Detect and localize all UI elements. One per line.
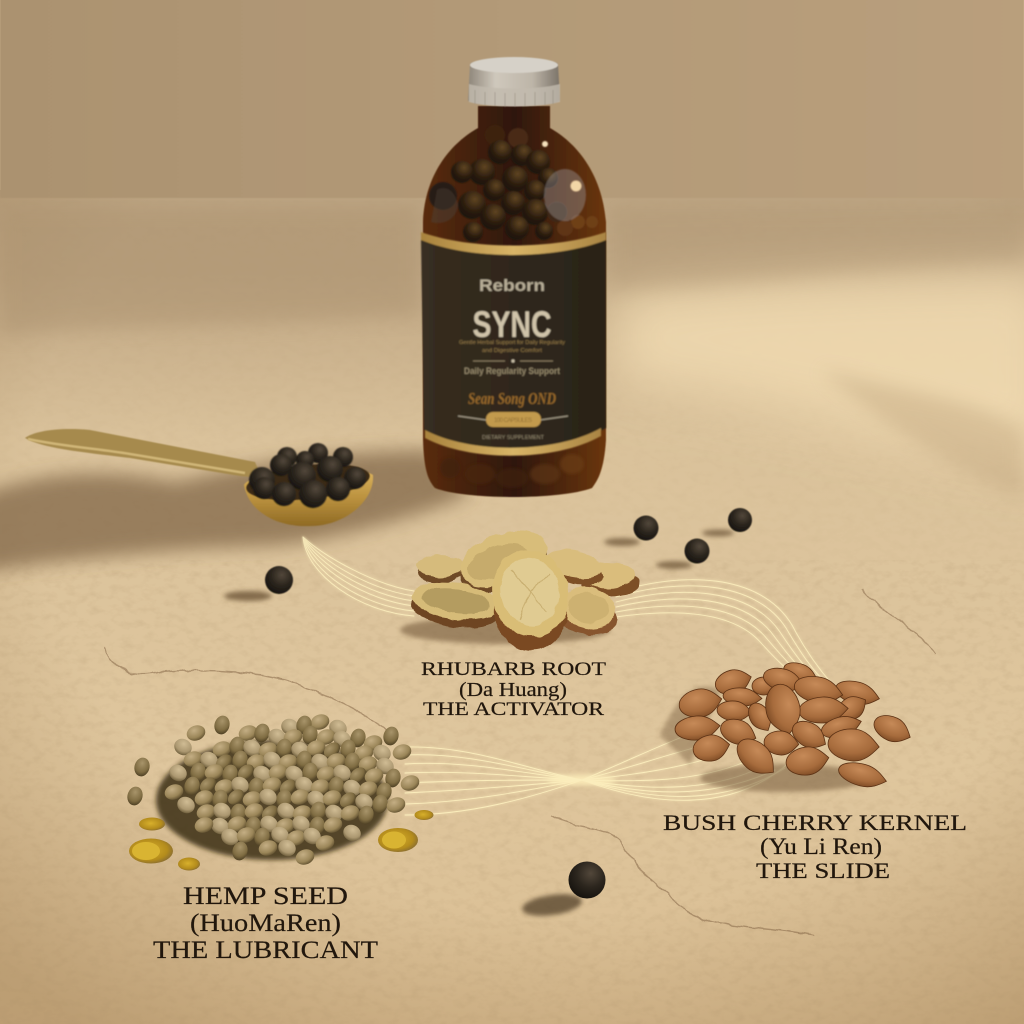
bottle label: Gentle Herbal Support for Daily Regularity (459, 340, 565, 346)
label: rhubarb root: (Da Huang) (459, 679, 567, 701)
bottle label: Daily Regularity Support (464, 366, 560, 376)
pills in spoon (249, 443, 366, 508)
pills inside bottle (429, 125, 598, 242)
slice: front left (409, 577, 501, 633)
label: bush cherry kernel: BUSH CHERRY KERNEL (663, 810, 967, 835)
spoon bowl (244, 470, 373, 526)
slice: centre (482, 541, 578, 659)
label: bush cherry kernel (663, 810, 967, 883)
kernel pile (660, 659, 915, 792)
bottle label: SYNC (472, 304, 552, 345)
bottle label (421, 232, 606, 456)
rhubarb shadow (400, 616, 610, 644)
bottle label: DIETARY SUPPLEMENT (482, 435, 545, 441)
label: bush cherry kernel: THE SLIDE (756, 858, 890, 883)
oil drop small left (139, 818, 165, 830)
label: hemp seed (153, 883, 378, 964)
rhubarb root slices (400, 520, 639, 659)
label: hemp seed: HEMP SEED (183, 883, 348, 910)
label: rhubarb root: THE ACTIVATOR (423, 699, 604, 720)
hemp seed pile (125, 712, 421, 867)
bottle cap (468, 57, 560, 107)
slice: front right (557, 582, 619, 635)
golden flow lines: spoon to rhubarb (303, 537, 414, 616)
bottle label: and Digestive Comfort (482, 348, 543, 354)
background: stone wall (0, 0, 1024, 198)
golden flow lines: rhubarb to bush cherry (616, 580, 832, 694)
label: hemp seed: (HuoMaRen) (190, 910, 341, 937)
label: hemp seed: THE LUBRICANT (153, 937, 378, 964)
bottle label: Sean Song OND (468, 389, 556, 408)
label: rhubarb root (421, 659, 606, 720)
slice: back left (417, 555, 463, 583)
spoon handle (25, 429, 262, 478)
kernel shadow (700, 764, 870, 792)
bottle label: Reborn (479, 276, 545, 295)
slice: back right (543, 545, 606, 589)
bottle base with pills (440, 454, 584, 488)
hemp seed shadow (156, 740, 388, 860)
surface cracks (103, 590, 935, 936)
oil drop far right (414, 810, 434, 820)
label: bush cherry kernel: (Yu Li Ren) (760, 834, 882, 859)
loose pills (224, 508, 752, 919)
slice: back large (452, 520, 554, 604)
label: rhubarb root: RHUBARB ROOT (421, 659, 606, 680)
golden flow lines: hemp seed to bush cherry (405, 732, 790, 815)
oil drop large left (129, 838, 173, 864)
oil drop bottom (178, 858, 200, 870)
product bottle (421, 57, 606, 497)
cast shadow: spoon and bottle (0, 450, 470, 572)
hemp seeds (125, 712, 421, 867)
slice: far right (581, 562, 639, 596)
hemp oil droplets (129, 810, 434, 870)
bottle glass body (423, 106, 606, 497)
rhubarb slice stack (409, 520, 639, 659)
bush cherry kernels (660, 659, 915, 792)
oil drop large right (378, 828, 418, 852)
bottle label: 100 CAPSULES (494, 418, 532, 424)
gold measuring spoon with pills (25, 429, 373, 526)
